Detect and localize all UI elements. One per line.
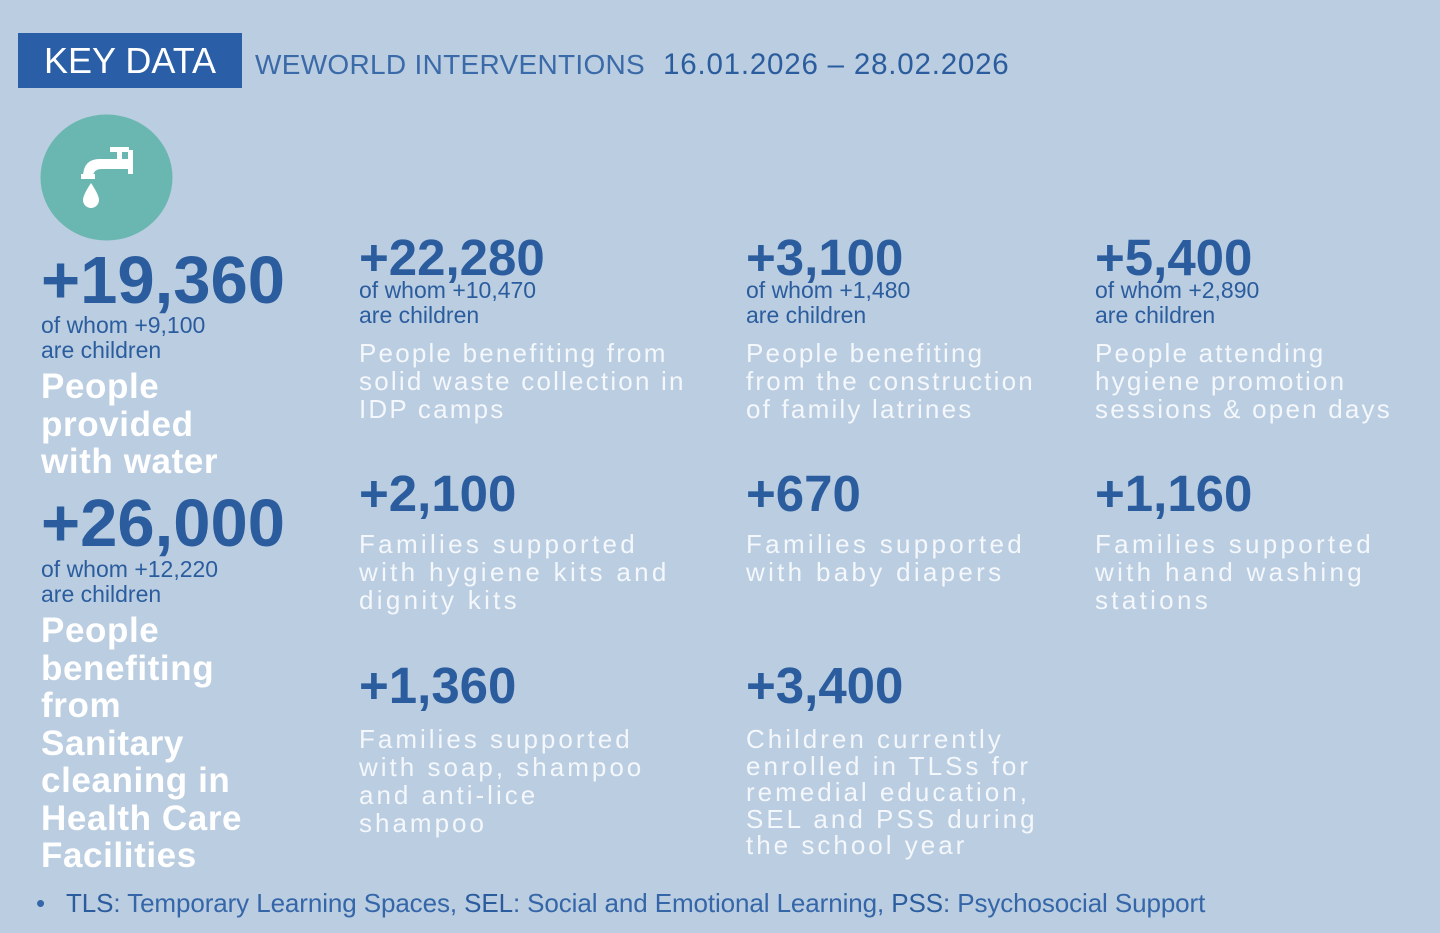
stat: hygiene kits: +2,100 [359,465,516,522]
stat: latrines: from the construction [746,366,1035,396]
stat: people provided with water [41,243,285,481]
stat: hygiene promotion: People attending [1095,338,1325,368]
stat: people provided with water: +19,360 [41,243,285,318]
stat: hygiene promotion: hygiene promotion [1095,366,1346,396]
stat: latrines: People benefiting [746,338,984,368]
stat: sanitary cleaning: Sanitary [41,724,184,762]
stat: people provided with water: People [41,367,159,406]
stat: people provided with water: of whom +9,100 [41,312,205,338]
stat: soap: +1,360 [359,657,516,714]
stat: hand washing: +1,160 [1095,465,1252,522]
stat: TLS children: Children currently [746,724,1004,754]
stat: sanitary cleaning: People [41,611,159,650]
stat: latrines: of whom +1,480 [746,277,910,303]
header [18,33,1010,88]
stat: people provided with water: are children [41,337,161,363]
stat: soap [359,657,644,838]
stat: solid waste [359,229,686,424]
stat: soap: and anti-lice [359,780,538,810]
footnote: TLS: Temporary Learning Spaces, SEL: Social and Emotional Learning, PSS: Psychosocial Support [66,888,1205,918]
stat: TLS children: SEL and PSS during [746,804,1038,834]
stat: hygiene kits: with hygiene kits and [359,557,670,587]
stat: hygiene promotion [1095,229,1392,424]
stat: latrines [746,229,1035,424]
stat: sanitary cleaning: from [41,686,121,725]
stat: TLS children: +3,400 [746,657,903,714]
stat: sanitary cleaning [41,486,285,875]
stat: solid waste: +22,280 [359,229,545,286]
subtitle: WEWORLD INTERVENTIONS 16.01.2026 – 28.02.2026 [255,48,1010,81]
stat: sanitary cleaning: Health Care [41,798,242,838]
stat: hygiene promotion: are children [1095,302,1215,328]
title box [18,33,242,88]
stat: sanitary cleaning: benefiting [41,648,214,688]
stat: TLS children: enrolled in TLSs for [746,750,1031,780]
stat: soap: shampoo [359,808,487,838]
stat: people provided with water: with water [41,442,218,481]
footnote: • [36,888,45,918]
stat: TLS children: remedial education, [746,777,1030,807]
stat: hand washing: Families supported [1095,529,1374,559]
stat: hygiene kits: dignity kits [359,585,520,615]
stat: sanitary cleaning: are children [41,581,161,607]
icon: water tap [40,114,172,240]
stat: solid waste: of whom +10,470 [359,277,536,303]
stat: hand washing [1095,465,1374,615]
stat: baby diapers [746,465,1025,587]
stat: latrines: +3,100 [746,229,903,286]
stat: hand washing: with hand washing [1095,557,1365,587]
stat: hygiene promotion: of whom +2,890 [1095,277,1259,303]
stat: TLS children: the school year [746,830,967,860]
stat: latrines: are children [746,302,866,328]
stat: sanitary cleaning: cleaning in [41,761,230,800]
stat: hygiene promotion: sessions & open days [1095,394,1392,424]
stat: hand washing: stations [1095,585,1211,615]
stat: solid waste: are children [359,302,479,328]
stat: solid waste: IDP camps [359,394,505,424]
stat: hygiene kits [359,465,670,615]
stat: soap: Families supported [359,724,633,754]
stat: baby diapers: Families supported [746,529,1025,559]
stat: hygiene promotion: +5,400 [1095,229,1252,286]
stat: solid waste: People benefiting from [359,338,668,368]
stat: hygiene kits: Families supported [359,529,638,559]
stat: people provided with water: provided [41,404,194,444]
stat: sanitary cleaning: +26,000 [41,486,285,561]
stat: TLS children [746,657,1038,860]
title box: KEY DATA [44,40,216,81]
stat: sanitary cleaning: of whom +12,220 [41,556,218,582]
stat: soap: with soap, shampoo [359,752,644,782]
stat: sanitary cleaning: Facilities [41,836,197,875]
stat: baby diapers: with baby diapers [746,557,1004,587]
stat: latrines: of family latrines [746,394,973,424]
stat: baby diapers: +670 [746,465,861,522]
stat: solid waste: solid waste collection in [359,366,686,396]
